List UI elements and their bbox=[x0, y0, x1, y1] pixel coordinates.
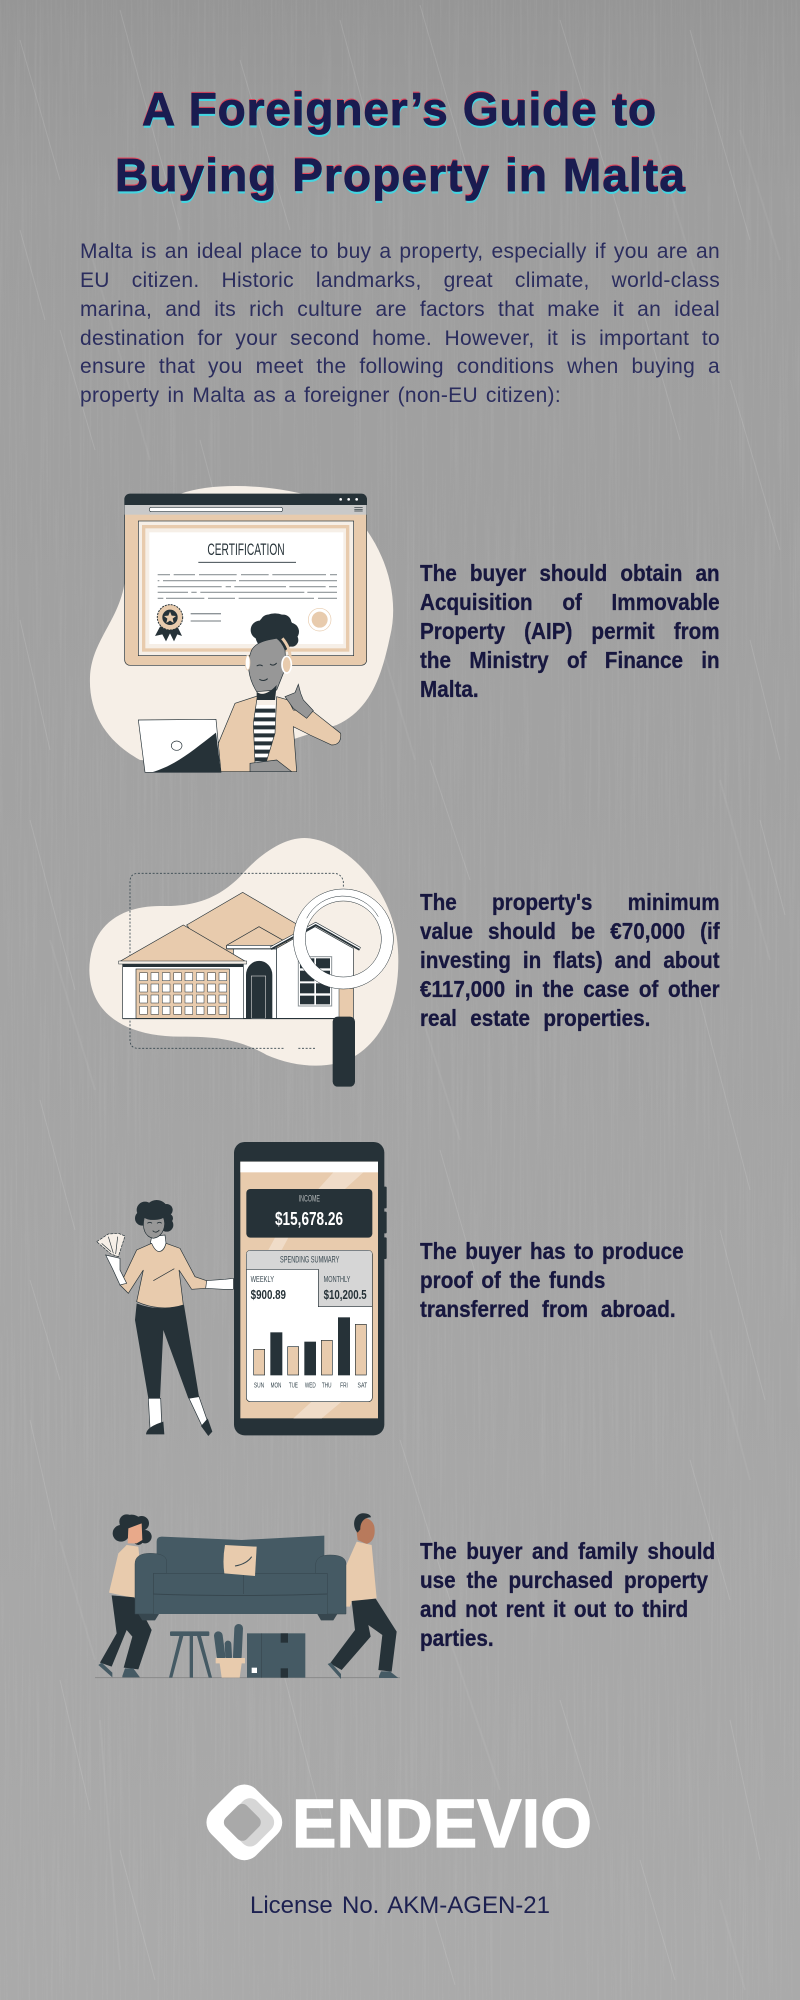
phone: INCOME bbox=[299, 1194, 320, 1204]
item 2 text: €117,000 in the case of other bbox=[420, 976, 720, 1002]
potted plant bbox=[216, 1628, 245, 1678]
item 2 text: investing in flats) and about bbox=[420, 947, 720, 973]
house bbox=[119, 892, 360, 1019]
magnifying glass bbox=[293, 889, 393, 1087]
item 1 text: Acquisition of Immovable bbox=[420, 589, 720, 615]
phone bbox=[234, 1142, 387, 1435]
woman with cash bbox=[97, 1200, 233, 1436]
phone: TUE bbox=[289, 1380, 298, 1389]
certificate window: CERTIFICATION bbox=[207, 540, 285, 559]
intro text block: ensure that you meet the following conditions when buying a bbox=[80, 355, 720, 378]
item 2 text: value should be €70,000 (if bbox=[420, 918, 720, 944]
intro text block: marina, and its rich culture are factors that make it an ideal bbox=[80, 298, 720, 321]
item 2 text: real estate properties. bbox=[420, 1005, 650, 1031]
illustration: couple carrying sofa bbox=[95, 1513, 400, 1679]
phone: $15,678.26 bbox=[275, 1209, 343, 1229]
item 1 text: Malta. bbox=[420, 676, 479, 702]
title: Buying Property in Malta bbox=[115, 149, 686, 201]
woman lifting bbox=[98, 1514, 152, 1677]
item 4 text: parties. bbox=[420, 1625, 494, 1651]
item 4 text: use the purchased property bbox=[420, 1567, 708, 1593]
title: A Foreigner’s Guide to bbox=[142, 83, 657, 135]
item 3 text: proof of the funds bbox=[420, 1267, 605, 1293]
license text: License No. AKM-AGEN-21 bbox=[250, 1892, 550, 1919]
woman with thumbs up bbox=[218, 613, 341, 772]
illustration: house and magnifying glass bbox=[89, 838, 398, 1087]
item 4 text: and not rent it out to third bbox=[420, 1596, 688, 1622]
logo wordmark: ENDEVIO bbox=[292, 1785, 592, 1862]
bar chart bbox=[254, 1318, 366, 1375]
logo mark bbox=[200, 1778, 289, 1867]
phone: MON bbox=[271, 1380, 281, 1389]
laptop bbox=[138, 719, 221, 772]
phone: FRI bbox=[340, 1380, 348, 1389]
item 1 text: the Ministry of Finance in bbox=[420, 647, 720, 673]
phone: THU bbox=[322, 1380, 332, 1389]
box bbox=[247, 1633, 305, 1678]
item 1 text: The buyer should obtain an bbox=[420, 560, 720, 586]
intro text block: Malta is an ideal place to buy a property, especially if you are an bbox=[80, 240, 720, 263]
item 1 text bbox=[420, 560, 720, 702]
sofa bbox=[135, 1536, 346, 1620]
logo bbox=[206, 1784, 592, 1862]
phone: WED bbox=[305, 1380, 316, 1389]
intro text block: property in Malta as a foreigner (non-EU citizen): bbox=[80, 384, 561, 407]
phone: WEEKLY bbox=[251, 1274, 274, 1284]
certificate window bbox=[125, 494, 367, 665]
phone: MONTHLY bbox=[324, 1274, 350, 1284]
item 3 text: The buyer has to produce bbox=[420, 1238, 684, 1264]
illustration: certificate and woman bbox=[90, 486, 394, 773]
phone: $10,200.5 bbox=[324, 1287, 367, 1302]
item 4 text bbox=[420, 1538, 715, 1652]
man lifting bbox=[328, 1513, 398, 1679]
intro text block: destination for your second home. However, it is important to bbox=[80, 327, 720, 350]
title bbox=[115, 83, 686, 203]
item 3 text bbox=[420, 1238, 684, 1322]
intro text block bbox=[80, 240, 720, 407]
phone: $900.89 bbox=[251, 1287, 286, 1302]
item 2 text bbox=[420, 889, 720, 1032]
illustration: woman with cash and phone bbox=[96, 1142, 387, 1436]
phone: SPENDING SUMMARY bbox=[280, 1255, 339, 1265]
item 4 text: The buyer and family should bbox=[420, 1538, 715, 1564]
phone: SAT bbox=[358, 1380, 367, 1389]
phone: SUN bbox=[254, 1380, 264, 1389]
item 2 text: The property's minimum bbox=[420, 889, 720, 915]
item 1 text: Property (AIP) permit from bbox=[420, 618, 720, 644]
intro text block: EU citizen. Historic landmarks, great climate, world-class bbox=[80, 269, 720, 292]
stool bbox=[169, 1631, 212, 1678]
item 3 text: transferred from abroad. bbox=[420, 1296, 676, 1322]
